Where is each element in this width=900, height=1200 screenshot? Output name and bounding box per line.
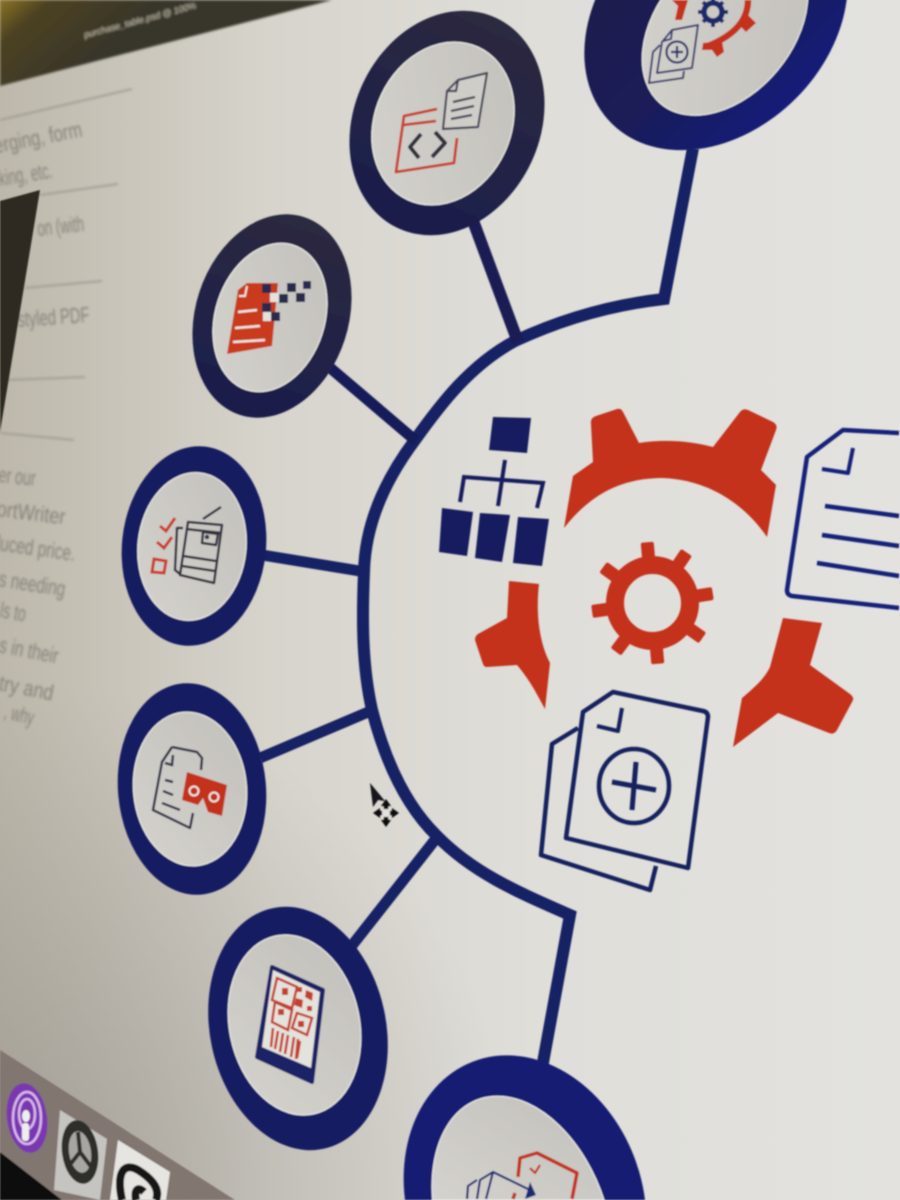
left text column, out of focus: , why (2, 699, 37, 730)
macOS dock (0, 1050, 235, 1200)
icon: red gear segment left (475, 581, 550, 709)
left text column, out of focus: s needing (0, 566, 67, 601)
icon: small centre gear (591, 542, 714, 664)
connector to VR icon (260, 710, 373, 758)
icon: system preferences gear (54, 1110, 107, 1200)
node: gear and document icon (531, 0, 900, 203)
node: document with VR headset icon (109, 677, 275, 901)
connector to PDF icon (328, 366, 416, 441)
hub outline with connectors (260, 148, 693, 1068)
dark panel on the left (0, 190, 40, 432)
mouse cursor and move handle (370, 783, 399, 827)
centre artwork (439, 409, 899, 890)
node: tablet with QR code icon (186, 890, 410, 1167)
icon: checklist (152, 518, 175, 573)
icon: printer (175, 507, 222, 583)
left text column, out of focus: on (with (36, 211, 85, 241)
icon: podcasts app (2, 1081, 52, 1155)
icon: add documents (541, 692, 708, 890)
node: printer checklist icon (112, 439, 276, 653)
application title bar (0, 0, 332, 86)
icon: organisation hierarchy (439, 417, 549, 566)
left text column, out of focus: styled PDF (17, 302, 90, 332)
icon: red gear segment top (564, 409, 777, 537)
icon: gear and add document (649, 0, 756, 83)
application title bar: purchase_table.psd @ 100% (82, 0, 197, 40)
node: file transfer icon (404, 1055, 645, 1200)
icon: document at right edge (787, 430, 899, 608)
icon: red document with checker pixels (227, 281, 311, 354)
hub arc (363, 148, 693, 1068)
icon: document and VR headset (153, 747, 227, 828)
icon: tablet with QR and barcode (257, 967, 323, 1082)
connector to QR icon (350, 836, 438, 948)
icon: code window and document (396, 73, 487, 172)
node: code window icon (314, 0, 580, 267)
connector to printer icon (262, 555, 366, 572)
icon: red gear segment right (733, 618, 853, 747)
left text column, out of focus (0, 89, 132, 730)
connector to code icon (472, 218, 518, 342)
icon: white tile with swirl (110, 1140, 170, 1200)
icon: stacked files and red document (467, 1153, 577, 1199)
node: pixelating PDF icon (167, 193, 377, 439)
